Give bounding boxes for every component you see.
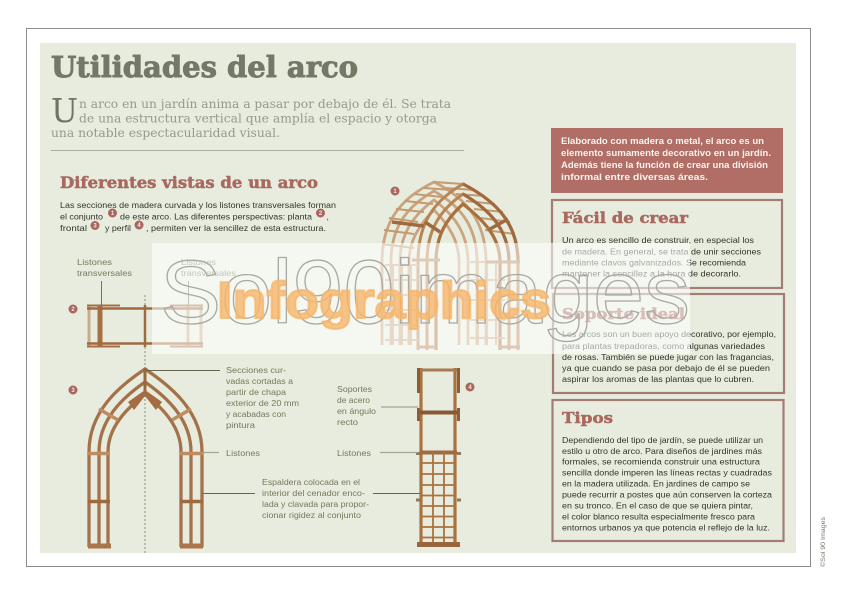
back arch (382, 182, 486, 345)
label: espaldera: Espaldera colocada en el (262, 477, 360, 487)
label: listones perfil (337, 448, 418, 458)
label: espaldera: interior del cenador enco- (262, 488, 365, 498)
panel: tipos: el color blanco resulta especialmente fresco para (562, 512, 755, 522)
description text: y perfil (105, 223, 131, 233)
description text (60, 200, 336, 233)
panel: soporte ideal: aspirar los aromas de las plantas que lo cubren. (562, 374, 754, 384)
panel: tipos: Tipos (562, 409, 613, 427)
panel: tipos: estilo u otro de arco. Para diseños de jardines más (562, 446, 762, 456)
callout: red intro box: Elaborado con madera o metal, el arco es un (561, 136, 764, 146)
description text: el conjunto (60, 212, 103, 222)
cross braces (392, 219, 508, 232)
intro text (51, 91, 452, 140)
panel: fácil de crear (552, 200, 782, 288)
label: listones transversales plan left: Listones (77, 257, 112, 267)
callout: red intro box: informal entre diversas áreas. (561, 172, 708, 182)
front arch (418, 184, 518, 350)
label: listones frente (203, 448, 260, 458)
label: listones transversales plan left: transversales (77, 268, 132, 278)
label: soportes de acero: en ángulo (337, 406, 376, 416)
watermark: Sol90images (160, 243, 690, 343)
intro text: n arco en un jardín anima a pasar por debajo de él. Se trata (79, 96, 452, 111)
panel: soporte ideal: Los arcos son un buen apoyo decorativo, por ejemplo, (562, 329, 776, 339)
intro text: de una estructura vertical que amplía el espacio y otorga (79, 110, 438, 126)
label: secciones curvadas: vadas cortadas a (226, 376, 293, 386)
label: secciones curvadas: pintura (226, 420, 255, 430)
label: secciones curvadas: partir de chapa (226, 387, 286, 397)
description text: 1 (111, 211, 115, 217)
panel: tipos: entornos urbanos ya que potencia el reflejo de la luz. (562, 522, 770, 532)
intro text: una notable espectacularidad visual. (51, 125, 280, 140)
label: listones transversales plan right: transversales (181, 268, 236, 278)
label: listones frente: Listones (226, 448, 260, 458)
heading: diferentes vistas: Diferentes vistas de un arco (60, 173, 318, 192)
label: secciones curvadas: exterior de 20 mm (226, 398, 299, 408)
title: Utilidades del arco (51, 50, 358, 84)
callout: red intro box (551, 128, 783, 193)
label: espaldera (203, 477, 420, 520)
description text: 2 (319, 211, 323, 217)
watermark: Infographics (217, 272, 551, 330)
panel: tipos: en la madera utilizada. En jardines de campo se (562, 478, 750, 488)
panel: soporte ideal: para plantas trepadoras, como algunas variedades (562, 341, 765, 351)
panel: soporte ideal: de rosas. También se puede jugar con las fragancias, (562, 352, 774, 362)
label: secciones curvadas: Secciones cur- (226, 365, 286, 375)
credit: ©Sol 90 Images (819, 516, 827, 567)
illustration: side view (416, 368, 461, 545)
panel: fácil de crear: mantener la sencillez a la hora de decorarlo. (562, 268, 741, 278)
panel: tipos: formales, se recomienda construir una estructura (562, 456, 760, 466)
illustration: front view arch (88, 368, 203, 547)
label: listones transversales plan left (77, 257, 132, 305)
panel: tipos: puede recurrir a postes que aún conserven la corteza (562, 490, 772, 500)
number badge 3 (68, 386, 78, 394)
label: soportes de acero: Soportes (337, 384, 372, 394)
intro text: U (51, 91, 78, 130)
label: soportes de acero: de acero (337, 395, 370, 405)
depth slats (382, 182, 515, 248)
panel: soporte ideal: ya que cuando se pasa por debajo de él se pueden (562, 363, 770, 373)
label: listones transversales plan right (181, 257, 236, 305)
description text: Las secciones de madera curvada y los listones transversales forman (60, 200, 336, 210)
illustration: perspective arch (382, 182, 520, 350)
label: espaldera: cionar rigidez al conjunto (262, 510, 361, 520)
panel: tipos: Dependiendo del tipo de jardín, se puede utilizar un (562, 435, 763, 445)
panel: tipos (552, 400, 784, 541)
illustration: plan view (87, 305, 203, 347)
label: listones transversales plan right: Listones (181, 257, 216, 267)
arch centre line (144, 295, 146, 553)
panel: soporte ideal: Soporte ideal (562, 305, 685, 323)
panel: fácil de crear: Un arco es sencillo de construir, en especial los (562, 235, 754, 245)
number badge 4: 4 (468, 385, 472, 391)
callout: red intro box: elemento sumamente decorativo en un jardín. (561, 148, 771, 158)
number badge 3: 3 (71, 388, 75, 394)
panel: fácil de crear: Fácil de crear (562, 209, 689, 227)
number badge 1 (390, 186, 400, 196)
panel: soporte ideal (553, 294, 784, 393)
number badge 4 (466, 382, 474, 392)
background panel (40, 43, 796, 553)
label: soportes de acero (337, 384, 418, 427)
panel: tipos: sencilla donde imperen las líneas rectas y cuadradas (562, 468, 772, 478)
label: listones perfil: Listones (337, 448, 371, 458)
description text: frontal (60, 223, 87, 233)
description text: , permiten ver la sencillez de esta estructura. (146, 223, 326, 233)
description text: , (326, 212, 329, 222)
lattice panels (385, 262, 518, 345)
panel: fácil de crear: de madera. En general, se trata de unir secciones (562, 246, 761, 256)
description text: de este arco. Las diferentes perspectivas: planta (120, 212, 312, 222)
description text: 4 (137, 223, 141, 229)
label: secciones curvadas: y acabadas con (226, 409, 286, 419)
callout: red intro box: Además tiene la función de crear una división (561, 160, 768, 170)
number badge 2: 2 (71, 307, 75, 313)
description text: 3 (93, 224, 97, 230)
label: espaldera: lada y clavada para propor- (262, 499, 369, 509)
label: soportes de acero: recto (337, 417, 358, 427)
number badge 2 (68, 304, 78, 314)
panel: tipos: en su tronco. En el caso de que se quiera pintar, (562, 500, 753, 510)
label: secciones curvadas (146, 365, 299, 430)
panel: fácil de crear: mediante clavos galvanizados. Se recomienda (562, 258, 746, 268)
number badge 1: 1 (393, 189, 397, 195)
